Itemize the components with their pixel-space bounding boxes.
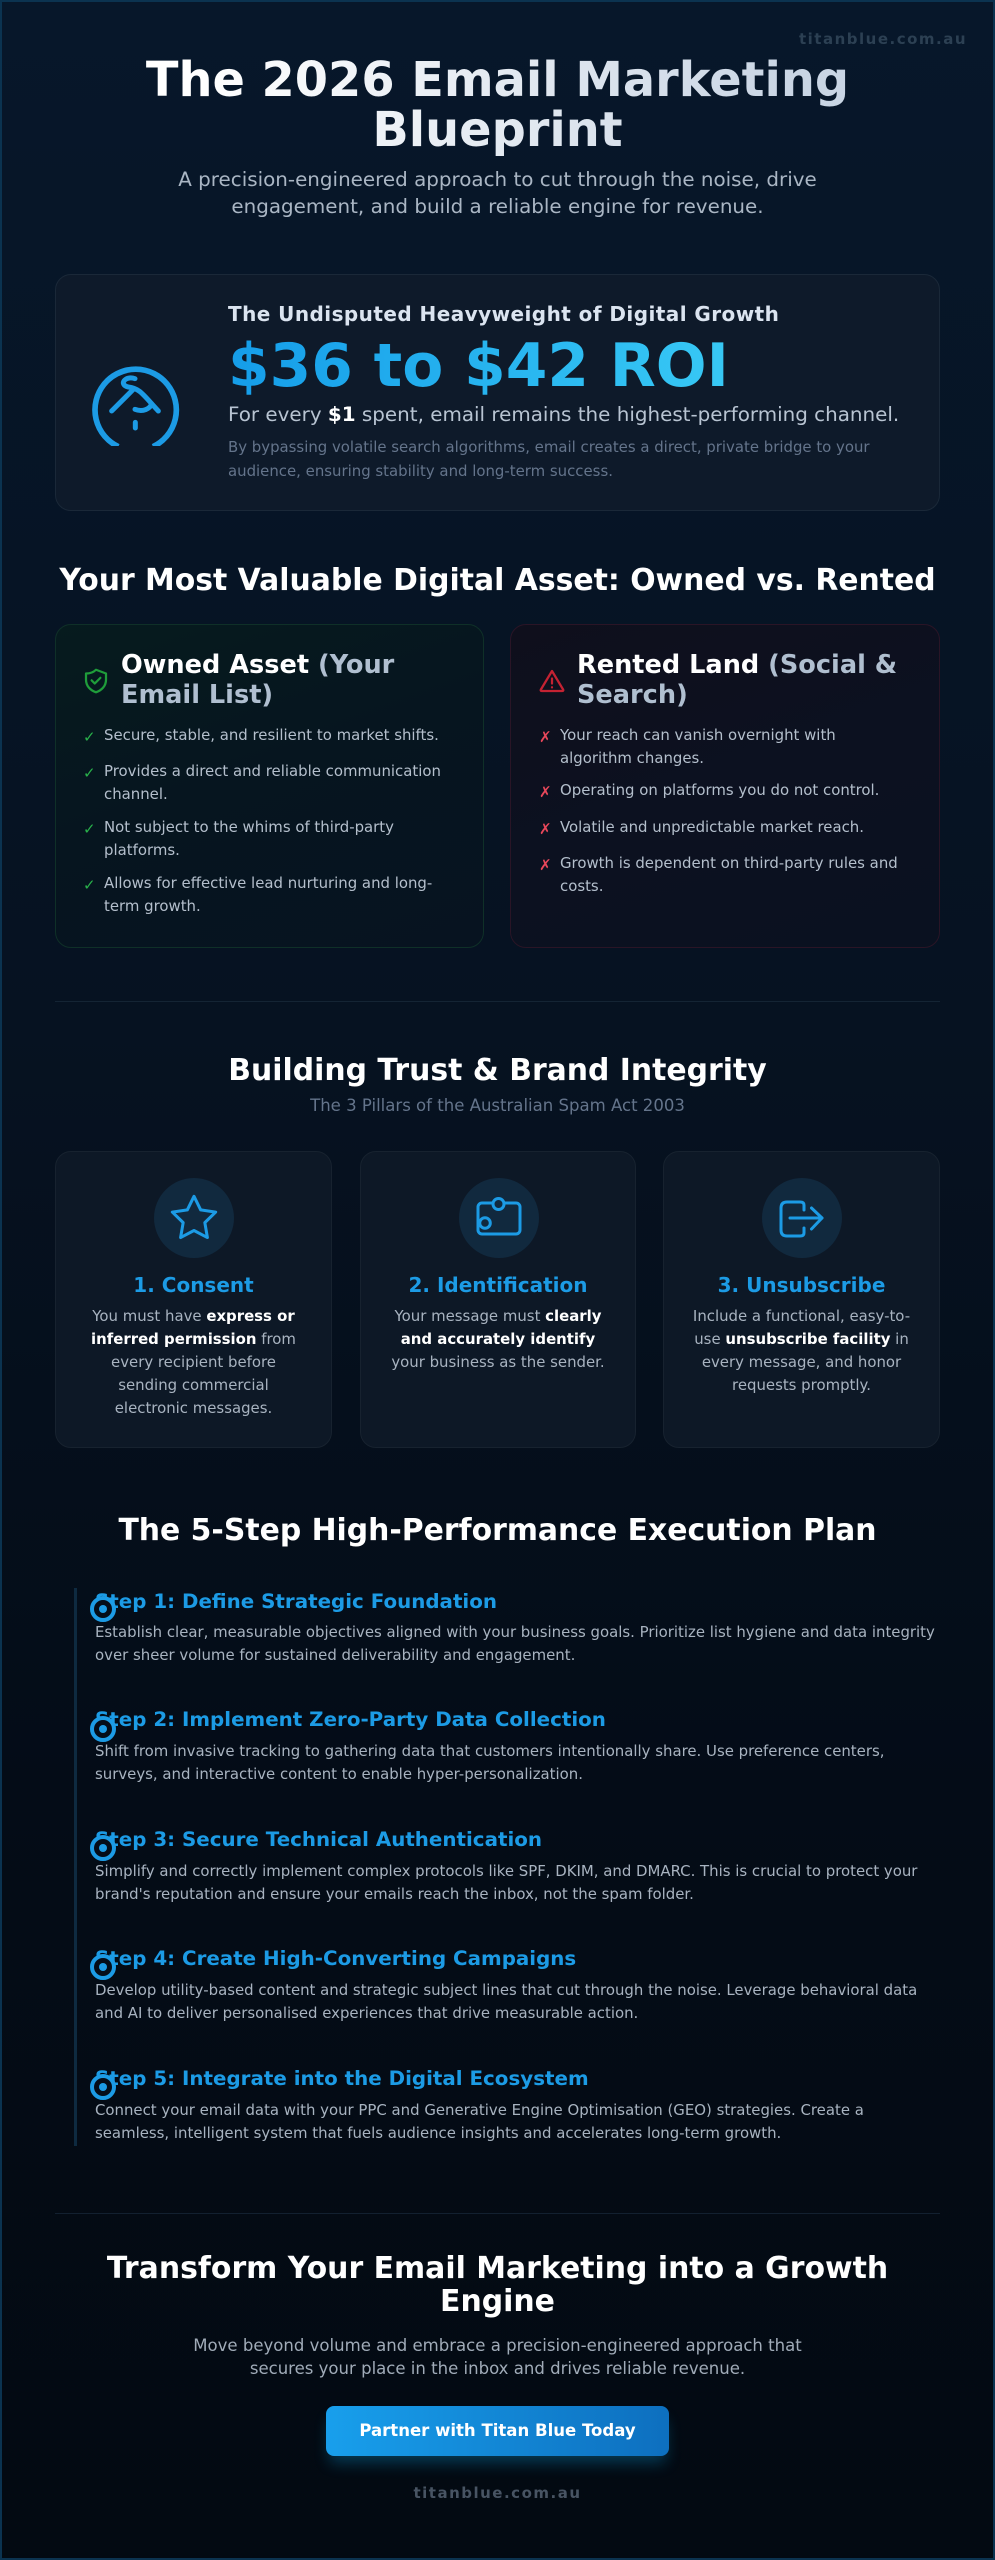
card title: Search) xyxy=(577,680,688,710)
panel: ROI hero xyxy=(55,274,940,511)
step text: Connect your email data with your PPC and Generative Engine Optimisation (GEO) strategies. Create a xyxy=(95,2101,864,2119)
icon: gauge xyxy=(92,366,180,446)
footer url: titanblue.com.au xyxy=(413,2484,582,2502)
list: ✗ xyxy=(539,728,552,746)
hero paragraph: audience, ensuring stability and long-term success. xyxy=(228,462,613,480)
pillar text: use unsubscribe facility in xyxy=(694,1330,909,1348)
pillar text: requests promptly. xyxy=(732,1376,871,1394)
step heading: Step 3: Secure Technical Authentication xyxy=(95,1828,542,1851)
subtitle xyxy=(178,168,817,218)
step text: over sheer volume for sustained deliverability and engagement. xyxy=(95,1646,575,1664)
panel: consent xyxy=(55,1151,332,1448)
list xyxy=(539,726,898,895)
step marker xyxy=(90,1716,116,1742)
list: ✓ xyxy=(83,728,96,746)
CTA heading: Transform Your Email Marketing into a Growth xyxy=(107,2251,888,2286)
step text: Simplify and correctly implement complex protocols like SPF, DKIM, and DMARC. This is crucial to protect your xyxy=(95,1862,917,1880)
step text: Shift from invasive tracking to gathering data that customers intentionally share. Use preference centers, xyxy=(95,1742,884,1760)
title: Blueprint xyxy=(372,103,623,158)
list: Secure, stable, and resilient to market shifts. xyxy=(104,726,439,744)
pillar text: You must have express or xyxy=(92,1307,295,1325)
step 3 xyxy=(90,1828,918,1903)
list: ✓ xyxy=(83,876,96,894)
CTA heading xyxy=(107,2251,888,2319)
heading: trust: Building Trust & Brand Integrity xyxy=(228,1053,767,1088)
pillar title: 2. Identification xyxy=(408,1273,588,1297)
list: Operating on platforms you do not control. xyxy=(560,781,879,799)
card title xyxy=(121,650,394,710)
step marker xyxy=(90,2074,116,2100)
icon: star xyxy=(154,1178,234,1258)
hero line: For every $1 spent, email remains the highest-performing channel. xyxy=(228,403,899,426)
step text: brand's reputation and ensure your emails reach the inbox, not the spam folder. xyxy=(95,1885,694,1903)
step marker xyxy=(90,1954,116,1980)
list: channel. xyxy=(104,785,168,803)
card title: Rented Land (Social & xyxy=(577,650,897,680)
list: platforms. xyxy=(104,841,180,859)
pillar text: every message, and honor xyxy=(702,1353,901,1371)
list: costs. xyxy=(560,877,603,895)
heading: owned vs rented: Your Most Valuable Digital Asset: Owned vs. Rented xyxy=(59,563,936,598)
pillar text xyxy=(693,1307,910,1394)
step 1 xyxy=(90,1590,935,1664)
step 2 xyxy=(90,1708,884,1783)
icon: warning triangle xyxy=(540,670,564,692)
step text: Establish clear, measurable objectives aligned with your business goals. Prioritize list hygiene and data integrity xyxy=(95,1623,935,1641)
step text: seamless, intelligent system that fuels audience insights and accelerates long-term growth. xyxy=(95,2124,781,2142)
step heading: Step 2: Implement Zero-Party Data Collection xyxy=(95,1708,606,1731)
step heading: Step 5: Integrate into the Digital Ecosystem xyxy=(95,2067,589,2090)
list: ✓ xyxy=(83,820,96,838)
list xyxy=(83,726,441,915)
step text xyxy=(95,1623,935,1664)
pillar text: inferred permission from xyxy=(91,1330,296,1348)
step 4 xyxy=(90,1947,917,2022)
list: ✗ xyxy=(539,820,552,838)
step text xyxy=(95,1981,917,2022)
list: Provides a direct and reliable communication xyxy=(104,762,441,780)
panel: owned asset xyxy=(55,624,484,948)
title: The 2026 Email Marketing xyxy=(146,53,849,108)
pillar text: and accurately identify xyxy=(401,1330,595,1348)
pillar text xyxy=(391,1307,605,1371)
step marker xyxy=(90,1835,116,1861)
pillar text: every recipient before xyxy=(111,1353,276,1371)
list: term growth. xyxy=(104,897,201,915)
step heading: Step 1: Define Strategic Foundation xyxy=(95,1590,497,1613)
CTA text xyxy=(193,2336,802,2378)
CTA text: secures your place in the inbox and drives reliable revenue. xyxy=(250,2359,745,2378)
pillar title: 3. Unsubscribe xyxy=(718,1273,885,1297)
subtitle: engagement, and build a reliable engine for revenue. xyxy=(231,195,764,218)
pillar text xyxy=(91,1307,296,1417)
step text xyxy=(95,1742,884,1783)
CTA button xyxy=(326,2406,669,2456)
watermark: top: titanblue.com.au xyxy=(799,30,967,48)
list: ✓ xyxy=(83,764,96,782)
step text: surveys, and interactive content to enable hyper-personalization. xyxy=(95,1765,583,1783)
pillar title: 1. Consent xyxy=(133,1273,254,1297)
pillar text: electronic messages. xyxy=(115,1399,272,1417)
step text: Develop utility-based content and strategic subject lines that cut through the noise. Leverage behavioral data xyxy=(95,1981,917,1999)
list: Allows for effective lead nurturing and long- xyxy=(104,874,432,892)
pillar text: sending commercial xyxy=(118,1376,269,1394)
panel: unsubscribe xyxy=(663,1151,940,1448)
title xyxy=(0,56,995,162)
CTA button: Partner with Titan Blue Today xyxy=(359,2421,636,2440)
list: Volatile and unpredictable market reach. xyxy=(560,818,864,836)
subheading: pillars: The 3 Pillars of the Australian Spam Act 2003 xyxy=(310,1096,685,1115)
step heading: Step 4: Create High-Converting Campaigns xyxy=(95,1947,576,1970)
pillar text: Your message must clearly xyxy=(395,1307,601,1325)
panel: rented land xyxy=(510,624,940,948)
card title xyxy=(577,650,897,710)
heading: execution plan: The 5-Step High-Performance Execution Plan xyxy=(118,1513,877,1548)
pillar text: Include a functional, easy-to- xyxy=(693,1307,910,1325)
step 5 xyxy=(90,2067,864,2142)
CTA heading: Engine xyxy=(440,2284,555,2319)
step marker xyxy=(90,1596,116,1622)
panel: identification xyxy=(360,1151,636,1448)
hero heading: The Undisputed Heavyweight of Digital Growth xyxy=(228,302,779,326)
hero ROI number: $36 to $42 ROI xyxy=(228,331,729,401)
step text: and AI to deliver personalised experiences that drive measurable action. xyxy=(95,2004,638,2022)
card title: Owned Asset (Your xyxy=(121,650,394,680)
hero paragraph xyxy=(228,438,870,480)
icon: shield xyxy=(84,668,108,694)
CTA text: Move beyond volume and embrace a precision-engineered approach that xyxy=(193,2336,802,2355)
step text xyxy=(95,1862,918,1903)
list: algorithm changes. xyxy=(560,749,704,767)
step text xyxy=(95,2101,864,2142)
card title: Email List) xyxy=(121,680,273,710)
icon: exit arrow xyxy=(762,1178,842,1258)
pillar text: your business as the sender. xyxy=(391,1353,605,1371)
hero paragraph: By bypassing volatile search algorithms, email creates a direct, private bridge to your xyxy=(228,438,870,456)
list: Your reach can vanish overnight with xyxy=(560,726,836,744)
subtitle: A precision-engineered approach to cut through the noise, drive xyxy=(178,168,817,191)
list: Not subject to the whims of third-party xyxy=(104,818,394,836)
list: ✗ xyxy=(539,783,552,801)
timeline xyxy=(74,1588,77,2146)
icon: id card xyxy=(459,1178,539,1258)
list: Growth is dependent on third-party rules and xyxy=(560,854,898,872)
list: ✗ xyxy=(539,856,552,874)
timeline line xyxy=(74,1588,77,2146)
